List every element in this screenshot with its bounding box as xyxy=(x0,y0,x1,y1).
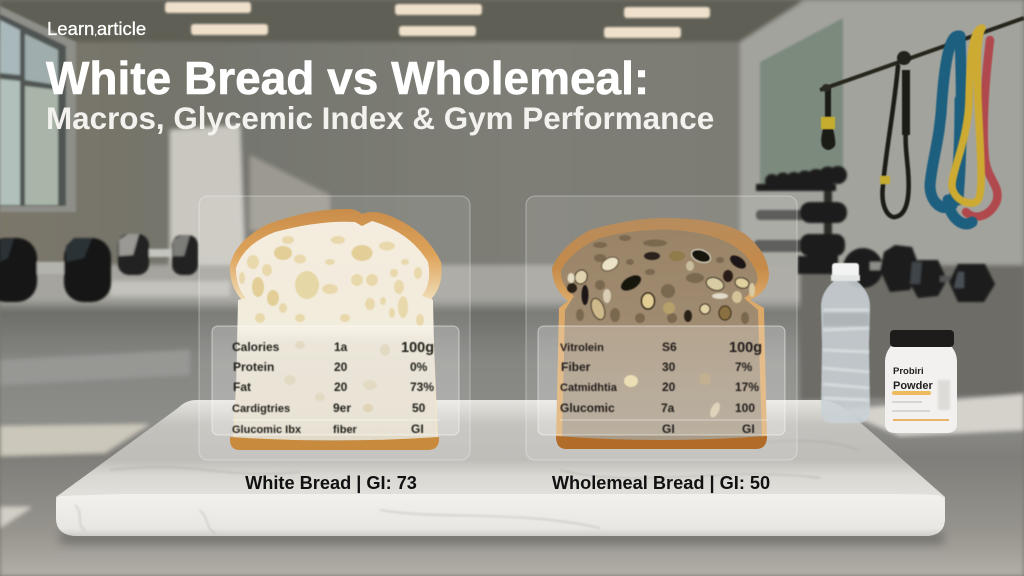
marble slab xyxy=(56,400,945,544)
nutrition panel: white bread: Cardigtries xyxy=(232,403,290,415)
nutrition panel: white bread: 1a xyxy=(334,340,348,354)
dumbbell rack xyxy=(754,166,847,274)
white bread slice xyxy=(230,209,442,450)
nutrition panel: white bread: 73% xyxy=(410,380,434,394)
protein powder tub: Probiri xyxy=(893,366,924,377)
nutrition panel: white bread: 20 xyxy=(334,380,348,394)
nutrition panel: white bread: Fat xyxy=(233,380,251,394)
nutrition panel: wholemeal bread: 100g xyxy=(729,340,762,356)
nutrition panel: white bread: Protein xyxy=(233,360,274,374)
caption: white bread: White Bread | GI: 73 xyxy=(245,473,417,493)
caption: wholemeal bread: Wholemeal Bread | GI: 50 xyxy=(552,473,770,493)
nutrition panel: white bread: 0% xyxy=(410,360,428,374)
nutrition panel: wholemeal bread: 20 xyxy=(662,380,676,394)
nutrition panel: wholemeal bread: 7% xyxy=(735,360,753,374)
back doorway xyxy=(760,18,843,190)
black resistance strap xyxy=(880,51,911,217)
nutrition panel: white bread: 50 xyxy=(412,401,426,415)
nutrition panel: wholemeal bread: 30 xyxy=(662,360,676,374)
nutrition panel: white bread: fiber xyxy=(333,424,358,436)
blue band xyxy=(930,36,972,224)
water bottle xyxy=(821,263,870,423)
nutrition panel: wholemeal bread: 17% xyxy=(735,380,759,394)
nutrition panel: white bread: Calories xyxy=(232,340,280,354)
nutrition panel: white bread: 9er xyxy=(333,401,351,415)
brand label: Learn,article xyxy=(47,18,146,39)
nutrition panel: white bread: GI xyxy=(411,422,424,436)
glass panel: white bread xyxy=(199,196,470,460)
nutrition panel: wholemeal bread: GI xyxy=(742,422,755,436)
nutrition panel: white bread xyxy=(212,326,459,436)
subtitle: Macros, Glycemic Index & Gym Performance xyxy=(46,101,714,136)
nutrition panel: wholemeal bread: S6 xyxy=(662,340,677,354)
wholemeal crumb and seeds xyxy=(567,235,755,419)
ceiling lights xyxy=(165,2,710,38)
nutrition panel: white bread: 100g xyxy=(401,340,434,356)
nutrition panel: wholemeal bread: Fiber xyxy=(561,360,591,374)
nutrition panel: wholemeal bread: Vitrolein xyxy=(560,342,604,354)
glass panel: wholemeal bread xyxy=(526,196,797,460)
protein powder tub: Powder xyxy=(893,380,933,392)
yellow band xyxy=(952,28,982,203)
right dumbbells on floor xyxy=(843,245,995,302)
nutrition panel: wholemeal bread: Glucomic xyxy=(560,401,615,415)
red band xyxy=(966,40,997,217)
nutrition panel: wholemeal bread xyxy=(538,326,785,436)
nutrition panel: white bread: Glucomic Ibx xyxy=(232,424,302,436)
nutrition panel: wholemeal bread: GI xyxy=(662,422,675,436)
window xyxy=(0,6,76,212)
left dumbbells xyxy=(0,234,198,302)
hanging handle strap xyxy=(821,84,835,150)
wholemeal bread slice xyxy=(552,218,769,449)
wall bar xyxy=(820,18,1024,90)
nutrition panel: white bread: 20 xyxy=(334,360,348,374)
nutrition panel: wholemeal bread: Catmidhtia xyxy=(560,382,618,394)
protein powder tub xyxy=(885,330,957,433)
white bread crumb holes xyxy=(239,236,424,412)
nutrition panel: wholemeal bread: 7a xyxy=(661,401,675,415)
title: White Bread vs Wholemeal: xyxy=(46,52,649,104)
nutrition panel: wholemeal bread: 100 xyxy=(735,401,755,415)
